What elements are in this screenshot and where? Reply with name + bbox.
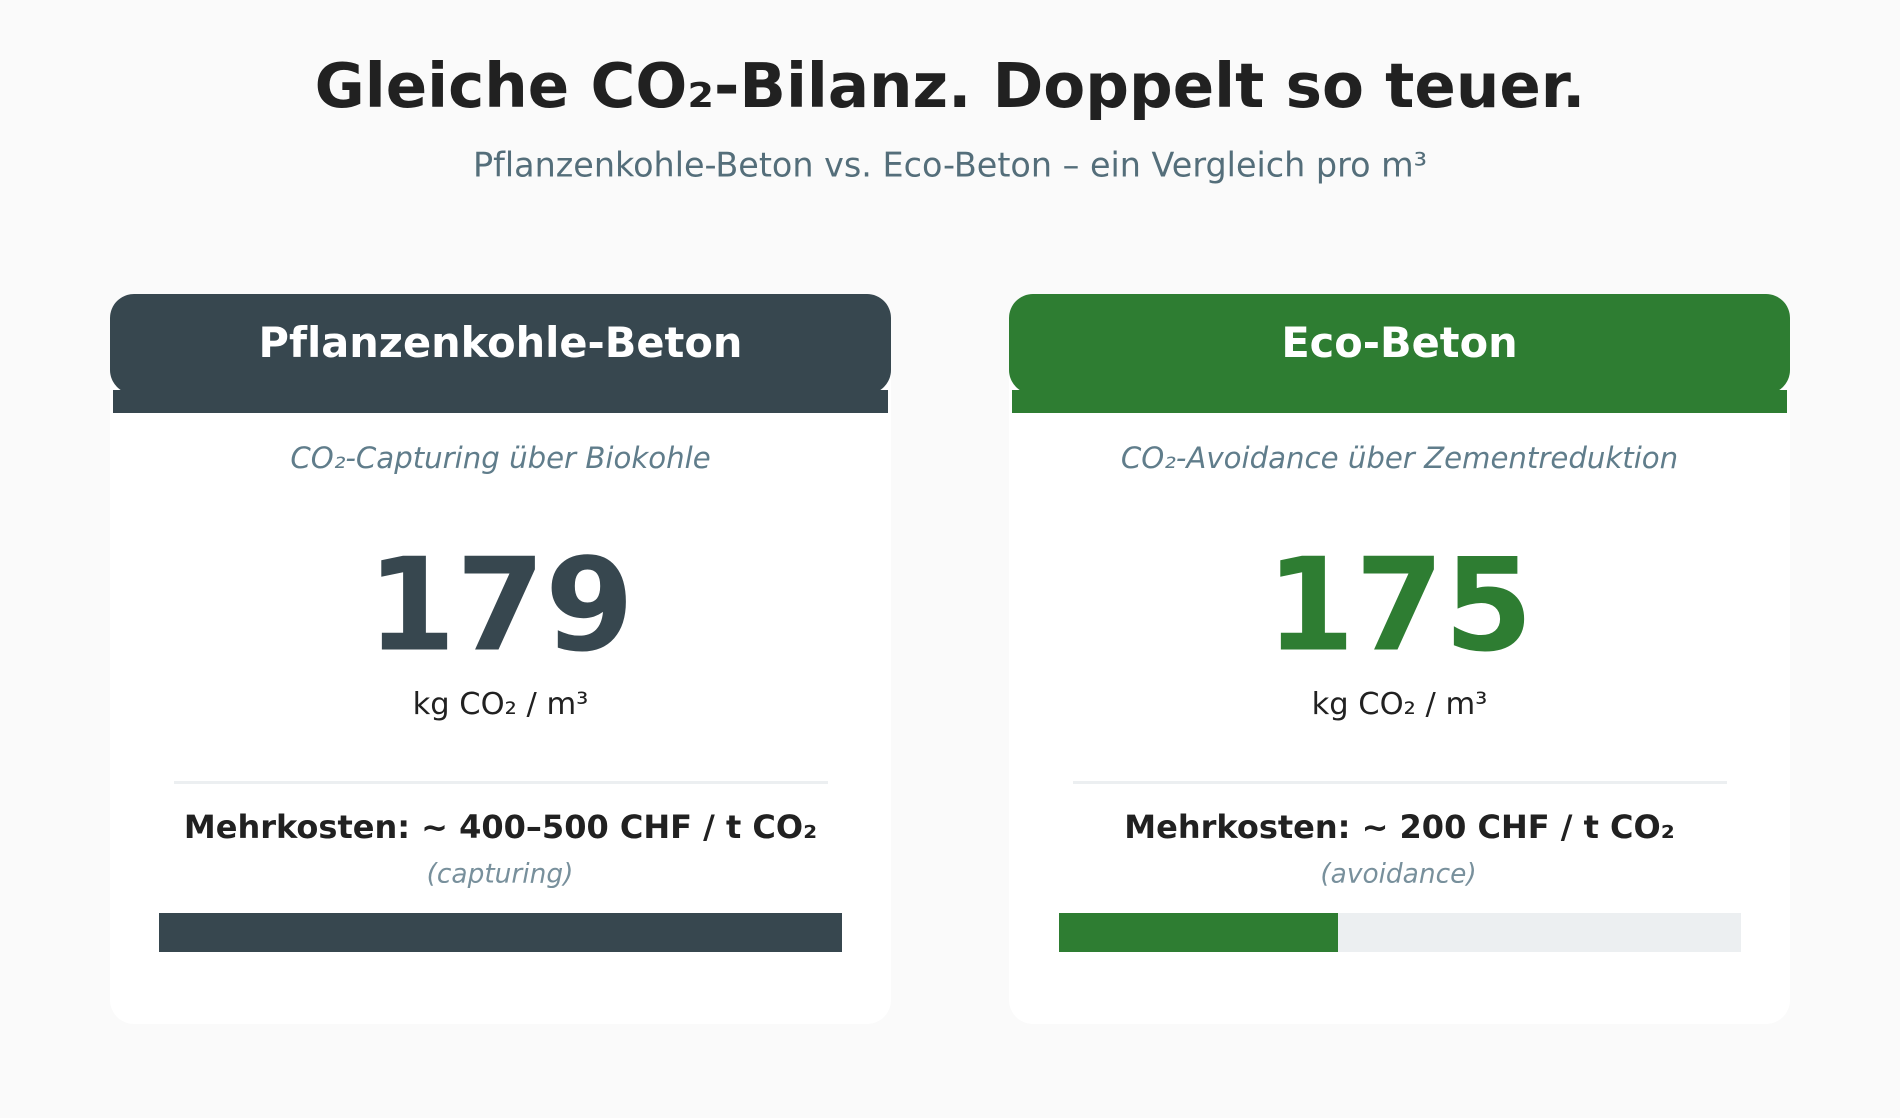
- title: Gleiche CO₂-Bilanz. Doppelt so teuer.: [315, 51, 1585, 122]
- value: 175: [1266, 532, 1533, 680]
- tagline: CO₂-Avoidance über Zementreduktion: [1121, 441, 1678, 475]
- card header: [1009, 294, 1790, 413]
- subtitle: Pflanzenkohle-Beton vs. Eco-Beton – ein Vergleich pro m³: [473, 146, 1427, 184]
- cost bar: [1059, 913, 1741, 952]
- tagline: CO₂-Capturing über Biokohle: [290, 441, 711, 475]
- cost note: (avoidance): [1320, 858, 1477, 890]
- card header: Eco-Beton: [1281, 318, 1518, 367]
- cost note: (capturing): [427, 858, 573, 890]
- unit: kg CO₂ / m³: [413, 687, 588, 722]
- card background: [1009, 294, 1790, 1024]
- panel: Eco-Beton: [1009, 294, 1790, 1024]
- card background: [110, 294, 891, 1024]
- unit: kg CO₂ / m³: [1312, 687, 1487, 722]
- card header: Pflanzenkohle-Beton: [259, 318, 742, 367]
- cost bar: [159, 913, 842, 952]
- additional cost: Mehrkosten: ~ 200 CHF / t CO₂: [1124, 808, 1675, 846]
- value: 179: [367, 532, 634, 680]
- card header: [110, 294, 891, 413]
- panel: Pflanzenkohle-Beton: [110, 294, 891, 1024]
- additional cost: Mehrkosten: ~ 400–500 CHF / t CO₂: [184, 808, 817, 846]
